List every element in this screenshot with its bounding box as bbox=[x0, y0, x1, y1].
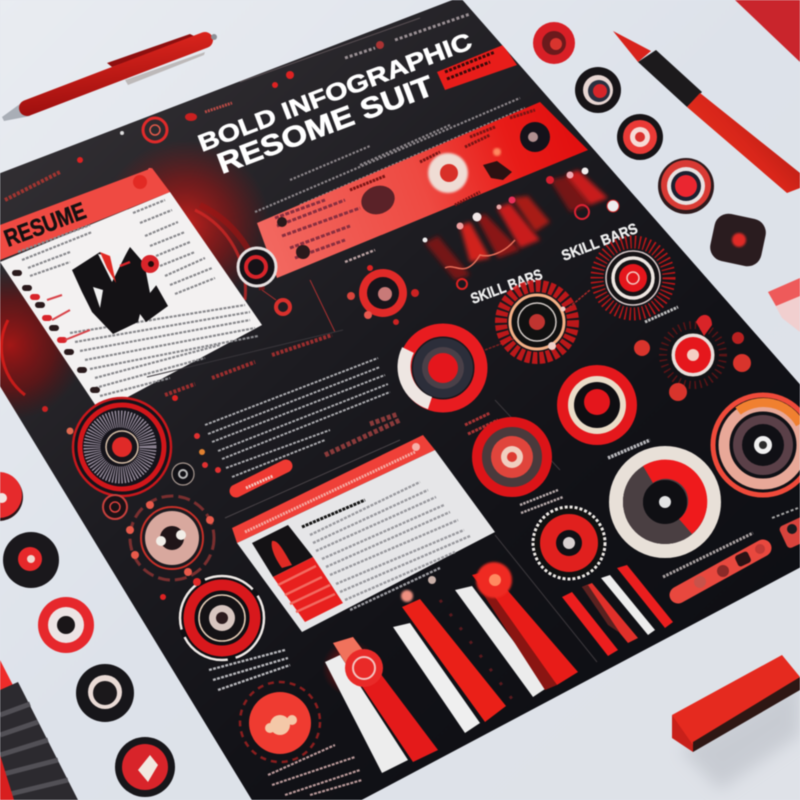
radial chart: burst icon right bbox=[597, 242, 669, 314]
suit illustration bbox=[72, 247, 168, 334]
panel: red banner bbox=[257, 102, 588, 278]
small red card bbox=[768, 278, 800, 332]
divider lines bbox=[495, 400, 597, 662]
radial chart: white and red ring bbox=[160, 574, 266, 662]
coin c bbox=[38, 597, 94, 653]
stacked striped swatches bbox=[0, 660, 78, 800]
caption text bbox=[209, 650, 290, 690]
radial chart: segmented ring bbox=[404, 325, 550, 406]
red leather corner bbox=[735, 0, 800, 62]
panel: summary sheet bbox=[232, 435, 495, 632]
coin 4 bbox=[658, 158, 714, 214]
caption bbox=[520, 490, 563, 513]
dots between bars bbox=[438, 599, 514, 700]
red pill button bbox=[236, 466, 286, 491]
skill bars heading left: SKILL BARS bbox=[469, 266, 545, 308]
footer text lines bbox=[268, 745, 362, 795]
coin d bbox=[76, 664, 134, 722]
radial chart: large corner dial bbox=[713, 395, 800, 495]
bar chart: small bars bbox=[562, 565, 673, 656]
radial chart: burst icon center bbox=[501, 286, 590, 358]
knob glow bbox=[324, 644, 368, 692]
bar chart: large bars bbox=[322, 562, 578, 773]
coin b bbox=[3, 532, 59, 588]
radial chart: dashed red dial bbox=[533, 507, 605, 579]
coin 3 bbox=[617, 114, 663, 160]
radial chart: skill icon one bbox=[345, 250, 419, 325]
radial chart: hatched disc bbox=[42, 398, 171, 496]
panel: resume sheet bbox=[0, 168, 262, 412]
skill bars heading right: SKILL BARS bbox=[559, 220, 640, 265]
rounded charm bbox=[708, 211, 768, 269]
coin a bbox=[0, 472, 23, 521]
radial chart: red flower badge bbox=[240, 682, 320, 762]
skill bars: lollipop streaks bbox=[422, 168, 619, 289]
radial chart: pink badge bbox=[126, 496, 214, 580]
resume heading: RESUME bbox=[1, 198, 90, 253]
red eraser block bbox=[672, 655, 800, 790]
radial chart: flower icon bbox=[634, 315, 751, 401]
coin 2 bbox=[575, 67, 621, 113]
coin 1 bbox=[533, 22, 575, 64]
resume bullets bbox=[15, 273, 97, 390]
title: RESOME SUIT bbox=[213, 70, 438, 181]
pen: red and black fountain pen bbox=[613, 31, 800, 193]
panel: experience text block bbox=[147, 330, 400, 518]
caption bbox=[608, 440, 650, 458]
right side coins bbox=[533, 22, 800, 332]
radial chart: brown ring bbox=[477, 422, 547, 492]
red glow behind resume bbox=[0, 131, 270, 420]
pen: red ballpoint bbox=[2, 34, 217, 121]
connector rings bbox=[238, 248, 335, 332]
subtitle text lines bbox=[255, 98, 525, 212]
coin e bbox=[115, 737, 175, 797]
donut chart bbox=[616, 453, 714, 551]
header small marks bbox=[5, 14, 470, 200]
caption small bbox=[645, 307, 678, 322]
radial chart: red white ring bbox=[465, 365, 637, 445]
left side coins bbox=[0, 472, 175, 797]
title bbox=[194, 28, 476, 181]
bar knobs bbox=[345, 562, 512, 687]
control pill bbox=[663, 533, 765, 595]
small ring icons bbox=[103, 463, 194, 519]
title: BOLD INFOGRAPHIC bbox=[194, 28, 476, 158]
red title tag bbox=[437, 45, 517, 90]
corner red button bbox=[772, 508, 800, 549]
